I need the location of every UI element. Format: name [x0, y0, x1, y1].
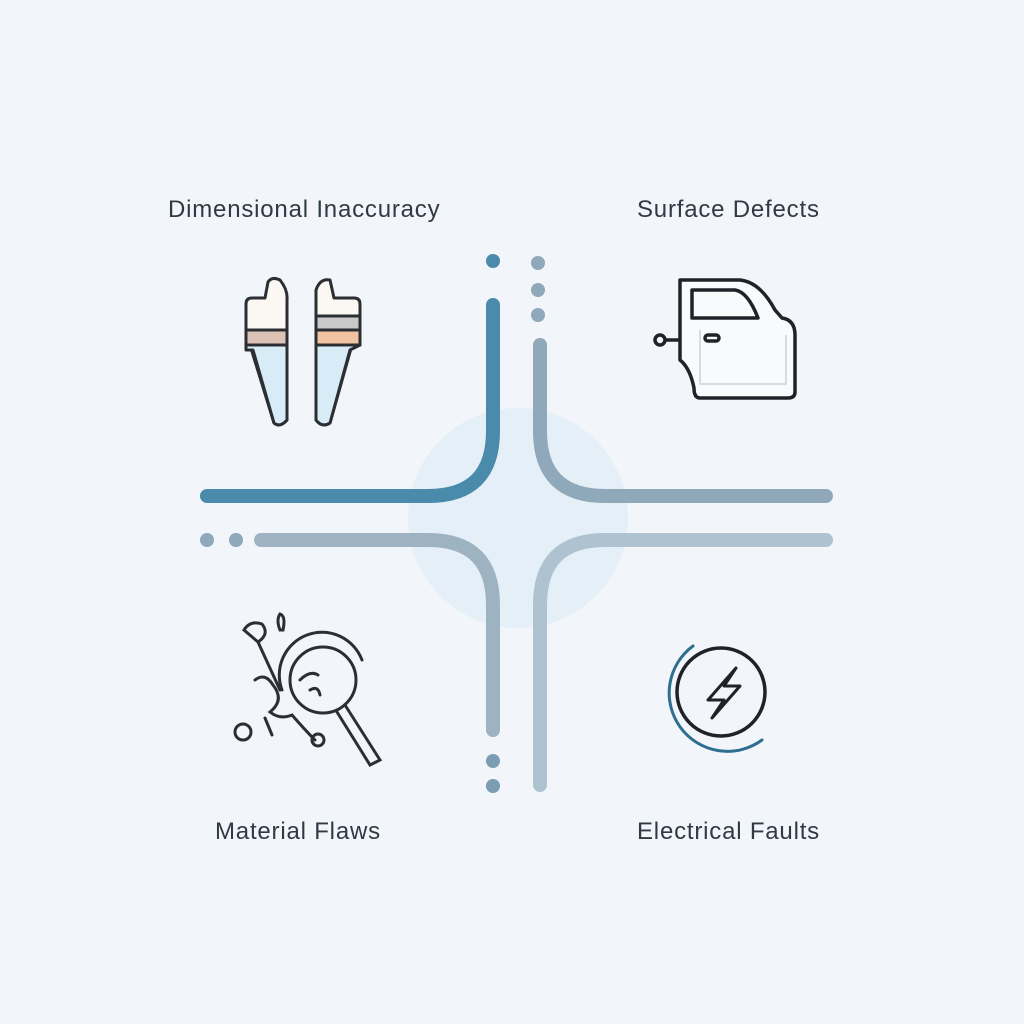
- title: Surface Defects: Surface Defects: [637, 196, 820, 223]
- icon: caliper jaws: [246, 278, 360, 425]
- icon: magnifier with particles: [235, 614, 380, 765]
- connector: top-left: [207, 254, 500, 496]
- connector: top-right: [531, 256, 826, 496]
- center glow: [408, 408, 628, 628]
- connector: bottom-right: [540, 540, 826, 785]
- title: Electrical Faults: Electrical Faults: [637, 818, 820, 845]
- title: Material Flaws: Material Flaws: [215, 818, 381, 845]
- icon: lightning circle: [669, 646, 765, 751]
- connector: bottom-left: [200, 533, 500, 793]
- title: Dimensional Inaccuracy: Dimensional Inaccuracy: [168, 196, 440, 223]
- icon: car door: [655, 280, 795, 398]
